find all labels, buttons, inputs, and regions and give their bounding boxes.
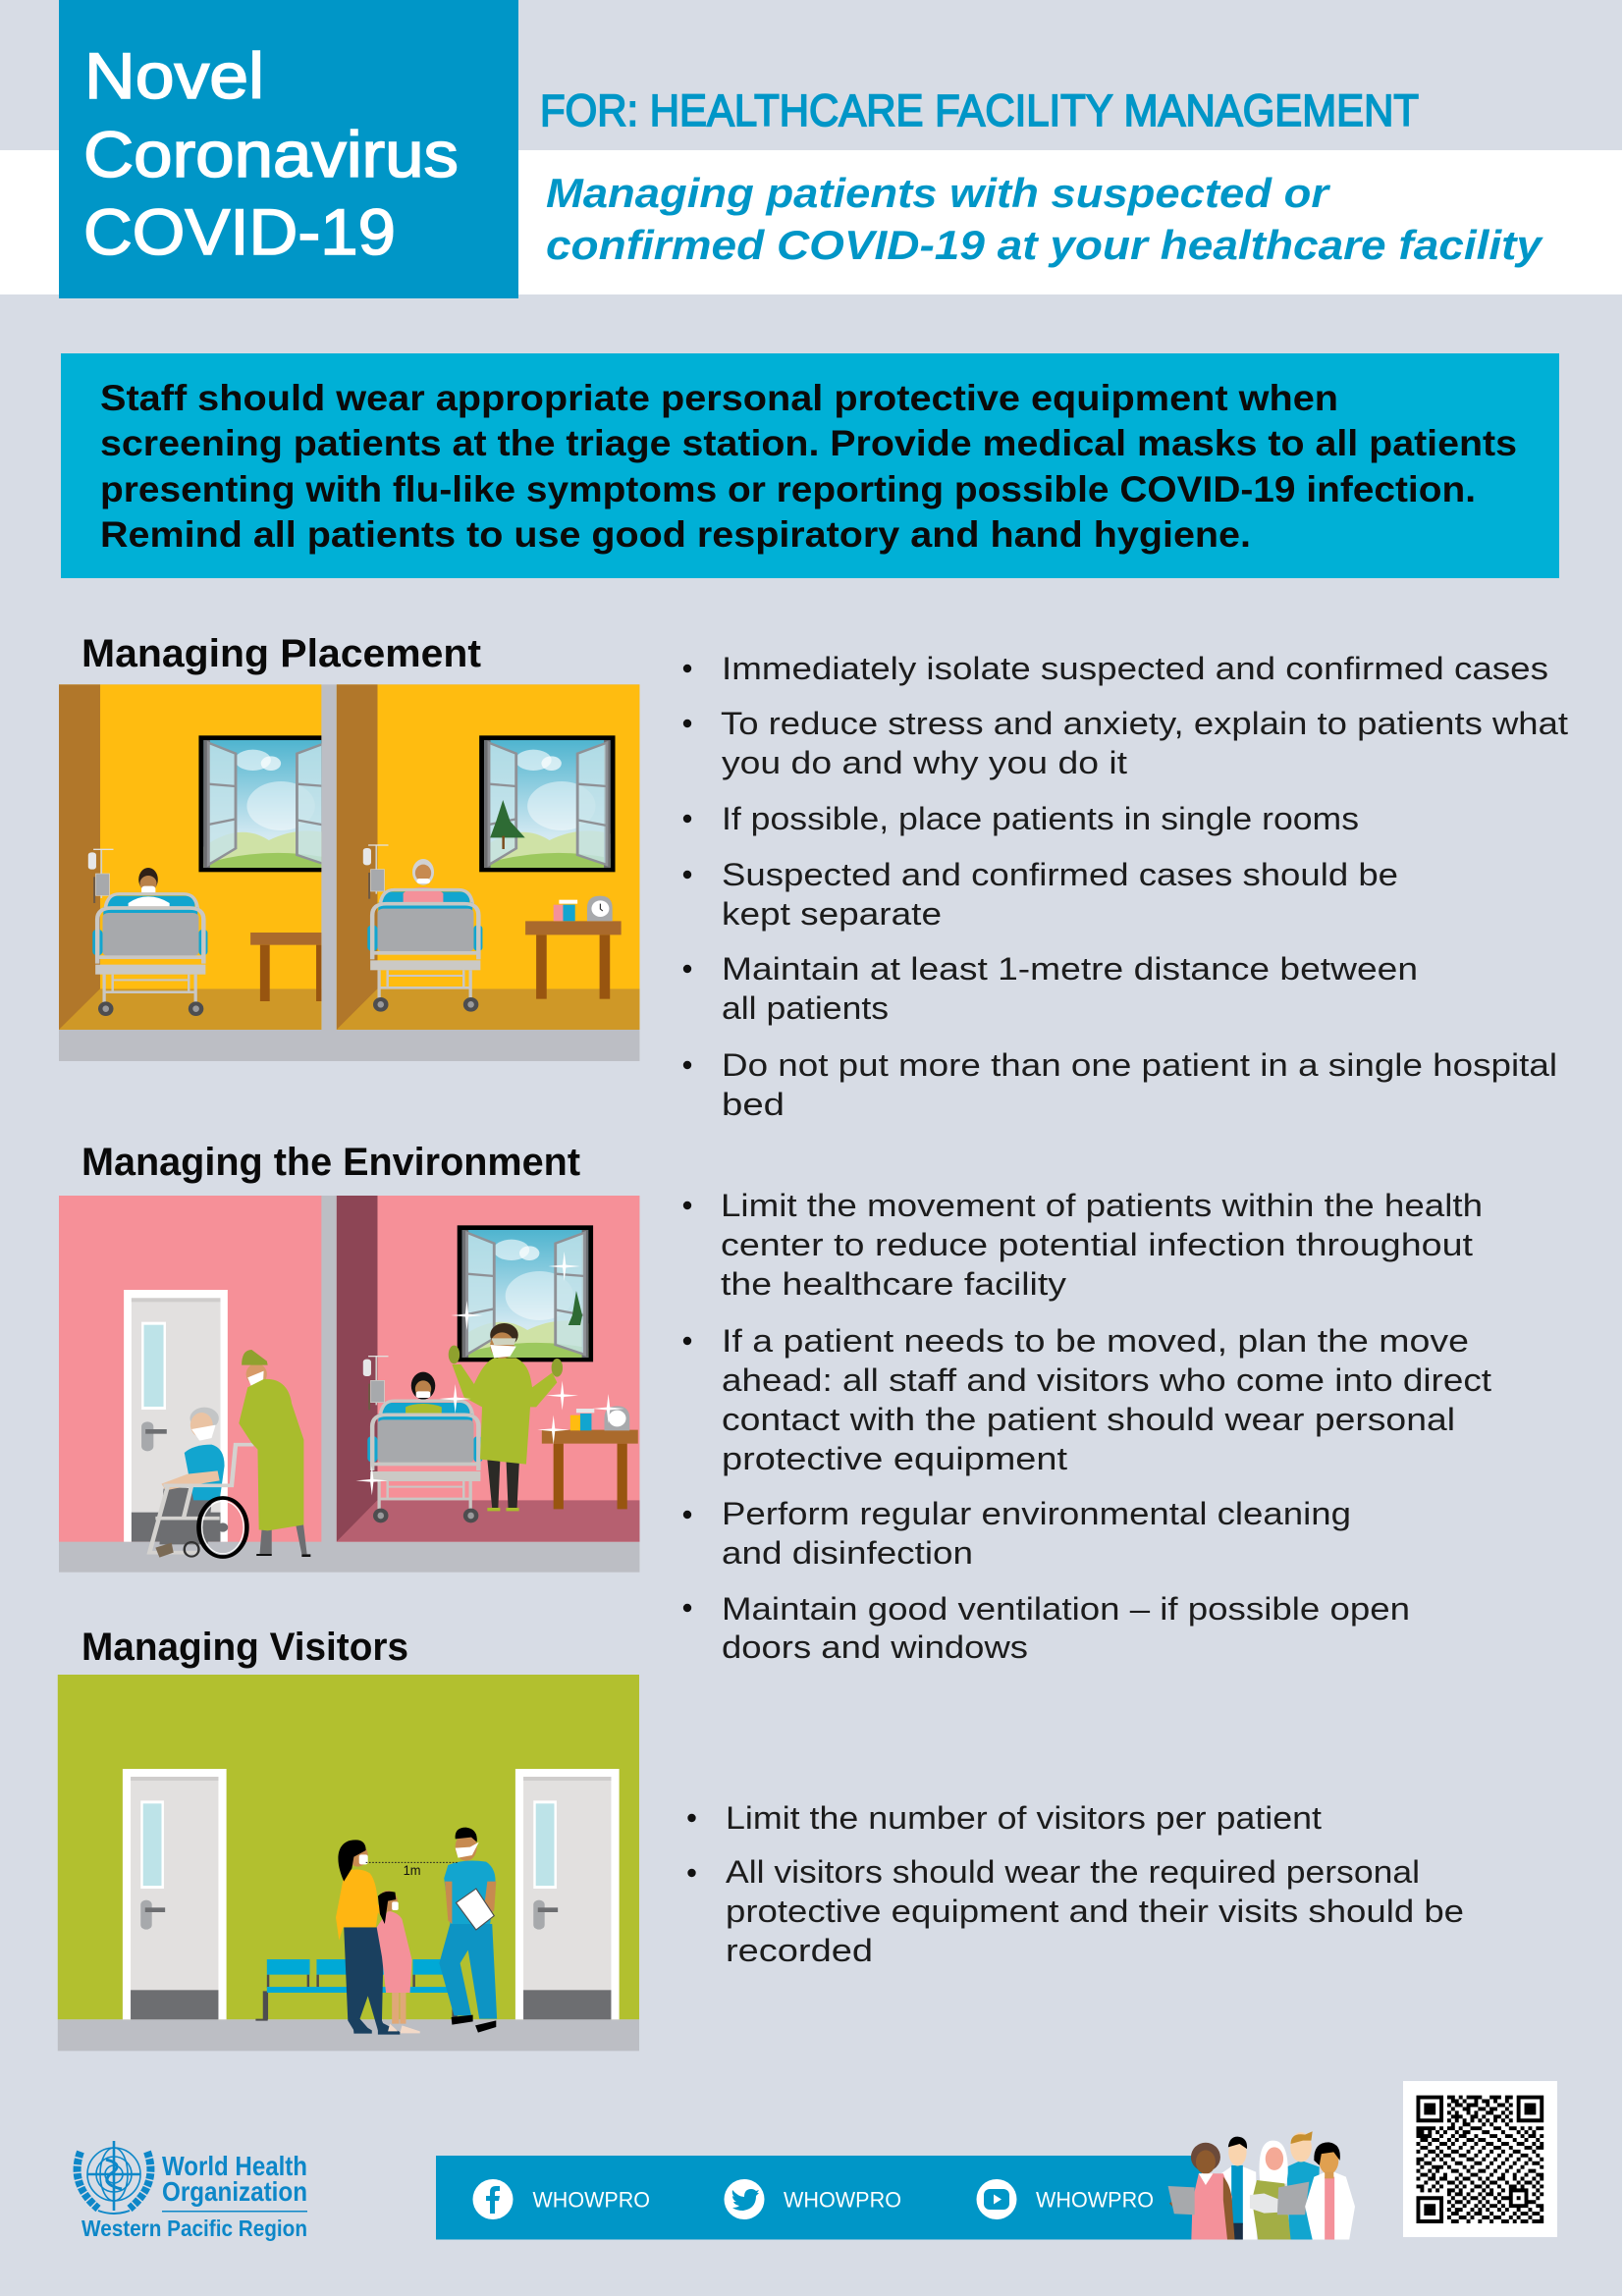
- figure: child: [377, 1891, 420, 2033]
- distance marker: 1 metre: 1m: [404, 1863, 421, 1879]
- title block: Coronavirus: [83, 118, 459, 190]
- bullets: placement: Maintain at least 1-metre distance between: [722, 951, 1418, 987]
- bullets: visitors: recorded: [726, 1933, 873, 1968]
- logo: World Health Organization: World Health: [162, 2151, 307, 2181]
- waiting bench: [255, 1959, 458, 2021]
- distance marker: 1 metre: [366, 1862, 459, 1879]
- title block: [59, 0, 518, 298]
- bullets: environment: doors and windows: [722, 1629, 1028, 1665]
- figure: visitor woman: [336, 1840, 400, 2035]
- bullets: visitors: [687, 1800, 1464, 1968]
- bullets: environment: [683, 1188, 1491, 1665]
- bullets: environment: If a patient needs to be moved, plan the move: [722, 1323, 1469, 1359]
- callout: staff guidance: Staff should wear appropriate personal protective equipment when: [100, 378, 1338, 418]
- icon: WHO emblem: [78, 2141, 150, 2214]
- logo: World Health Organization: Western Pacific Region: [81, 2216, 307, 2241]
- bullets: placement: Suspected and confirmed cases should be: [722, 857, 1398, 892]
- heading: Managing the Environment: Managing the Environment: [81, 1141, 580, 1184]
- bullets: environment: ahead: all staff and visitors who come into direct: [722, 1362, 1491, 1398]
- bullets: placement: you do and why you do it: [722, 745, 1127, 780]
- bullets: environment: center to reduce potential infection throughout: [721, 1227, 1473, 1262]
- figure: nurse pushing wheelchair: [239, 1350, 310, 1557]
- figure: patient in wheelchair: [149, 1408, 253, 1558]
- bullets: placement: Do not put more than one patient in a single hospital: [722, 1047, 1557, 1083]
- logo: World Health Organization: Organization: [162, 2176, 307, 2207]
- heading: Managing Placement: Managing Placement: [81, 632, 481, 675]
- bullets: placement: If possible, place patients in single rooms: [722, 801, 1359, 836]
- bullets: placement: To reduce stress and anxiety, explain to patients what: [721, 706, 1568, 741]
- callout: staff guidance: screening patients at the triage station. Provide medical masks to all patients: [100, 423, 1517, 463]
- bullets: environment: Maintain good ventilation – if possible open: [722, 1591, 1410, 1627]
- bullets: placement: bed: [722, 1087, 785, 1122]
- icon: Twitter: [725, 2179, 764, 2219]
- callout: staff guidance: presenting with flu-like symptoms or reporting possible COVID-19 infection.: [100, 469, 1476, 509]
- title block: Novel: [84, 39, 264, 112]
- illustration: environment rooms: [59, 1196, 639, 1573]
- social media bar: WHOWPRO: [1036, 2188, 1154, 2213]
- heading: Managing Visitors: Managing Visitors: [81, 1626, 408, 1669]
- bullets: environment: contact with the patient should wear personal: [722, 1402, 1455, 1437]
- title block: COVID-19: [83, 195, 396, 268]
- bullets: environment: Perform regular environmental cleaning: [722, 1496, 1351, 1531]
- subtitle: confirmed COVID-19 at your healthcare facility: [546, 222, 1544, 268]
- subtitle: [546, 170, 1544, 268]
- callout: staff guidance: Remind all patients to use good respiratory and hand hygiene.: [100, 514, 1251, 555]
- bullets: environment: Limit the movement of patients within the health: [721, 1188, 1483, 1223]
- icon: Facebook: [473, 2179, 513, 2219]
- callout: staff guidance: [61, 353, 1559, 578]
- bullets: placement: all patients: [722, 990, 889, 1026]
- figure: staff member with clipboard: [439, 1828, 497, 2033]
- audience line: FOR: HEALTHCARE FACILITY MANAGEMENT: [540, 85, 1419, 135]
- bullets: placement: [683, 651, 1568, 1122]
- figure: cleaner in green gown: [449, 1323, 563, 1511]
- illustration: placement rooms: [59, 684, 639, 1061]
- illustration: healthcare workers group: [1168, 2131, 1355, 2240]
- subtitle: Managing patients with suspected or: [546, 170, 1331, 216]
- header white band: [0, 150, 1624, 294]
- bullets: visitors: protective equipment and their visits should be: [726, 1894, 1464, 1929]
- bullets: visitors: All visitors should wear the required personal: [726, 1854, 1420, 1890]
- social media bar: WHOWPRO: [784, 2188, 901, 2213]
- bullets: environment: and disinfection: [722, 1535, 973, 1571]
- icon: YouTube: [976, 2179, 1017, 2219]
- social media bar: WHOWPRO: [532, 2188, 650, 2213]
- bullets: environment: the healthcare facility: [721, 1266, 1066, 1302]
- bullets: placement: Immediately isolate suspected and confirmed cases: [722, 651, 1548, 686]
- bullets: visitors: Limit the number of visitors per patient: [726, 1800, 1322, 1836]
- bullets: placement: kept separate: [722, 896, 942, 932]
- illustration: visitors corridor: [58, 1675, 639, 2051]
- logo: World Health Organization: [78, 2141, 307, 2241]
- QR code: [1403, 2081, 1557, 2237]
- social media bar: [436, 2156, 1202, 2240]
- bullets: environment: protective equipment: [722, 1441, 1067, 1476]
